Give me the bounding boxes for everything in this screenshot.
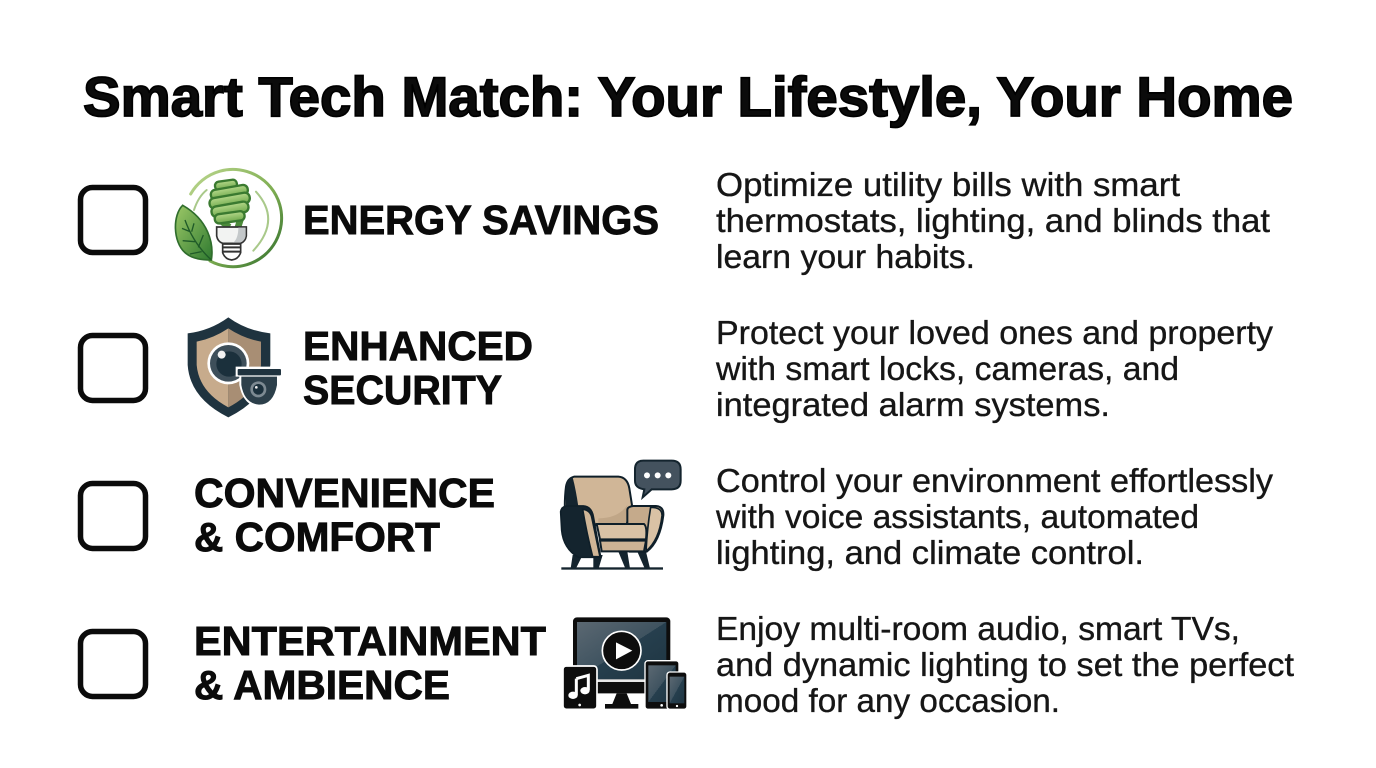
icon: energy bulb and leaf xyxy=(175,169,282,267)
heading: energy savings: ENERGY SAVINGS xyxy=(303,197,659,243)
text: enhanced security description: with smart locks, cameras, and xyxy=(715,350,1179,387)
heading: enhanced security: SECURITY xyxy=(303,367,502,413)
checkbox: energy savings xyxy=(80,188,146,252)
text: energy savings description: Optimize utility bills with smart xyxy=(716,166,1180,203)
text: convenience and comfort description xyxy=(715,462,1274,571)
text: energy savings description xyxy=(716,166,1270,275)
icon: security shield and camera xyxy=(188,317,283,417)
heading: entertainment and ambience: & AMBIENCE xyxy=(194,662,450,708)
icon: screens and devices xyxy=(563,617,687,709)
text: convenience and comfort description: with voice assistants, automated xyxy=(715,498,1199,535)
text: energy savings description: learn your habits. xyxy=(716,238,975,275)
panel: enhanced security row xyxy=(80,314,1274,423)
heading: entertainment and ambience xyxy=(194,618,546,708)
checkbox: entertainment and ambience xyxy=(80,632,146,696)
text: enhanced security description xyxy=(715,314,1274,423)
panel: energy savings row xyxy=(80,166,1270,275)
title: Smart Tech Match: Your Lifestyle, Your Home xyxy=(83,65,1293,128)
checkbox: convenience and comfort xyxy=(80,484,146,548)
panel: entertainment and ambience row xyxy=(80,610,1294,719)
heading: enhanced security xyxy=(303,323,533,413)
text: enhanced security description: Protect your loved ones and property xyxy=(716,314,1274,351)
text: entertainment and ambience description: and dynamic lighting to set the perfect xyxy=(716,646,1294,683)
text: enhanced security description: integrated alarm systems. xyxy=(716,386,1110,423)
text: convenience and comfort description: Control your environment effortlessly xyxy=(716,462,1274,499)
panel: convenience and comfort row xyxy=(80,461,1274,571)
heading: enhanced security: ENHANCED xyxy=(303,323,533,369)
heading: convenience and comfort xyxy=(194,470,495,560)
text: convenience and comfort description: lighting, and climate control. xyxy=(716,534,1144,571)
icon: armchair with speech bubble xyxy=(561,461,681,570)
heading: convenience and comfort: CONVENIENCE xyxy=(194,470,495,516)
text: entertainment and ambience description: mood for any occasion. xyxy=(716,682,1060,719)
text: energy savings description: thermostats, lighting, and blinds that xyxy=(716,202,1270,239)
text: entertainment and ambience description: Enjoy multi-room audio, smart TVs, xyxy=(716,610,1240,647)
checkbox: enhanced security xyxy=(80,336,146,400)
heading: entertainment and ambience: ENTERTAINMENT xyxy=(194,618,546,664)
heading: convenience and comfort: & COMFORT xyxy=(194,514,440,560)
text: entertainment and ambience description xyxy=(716,610,1294,719)
